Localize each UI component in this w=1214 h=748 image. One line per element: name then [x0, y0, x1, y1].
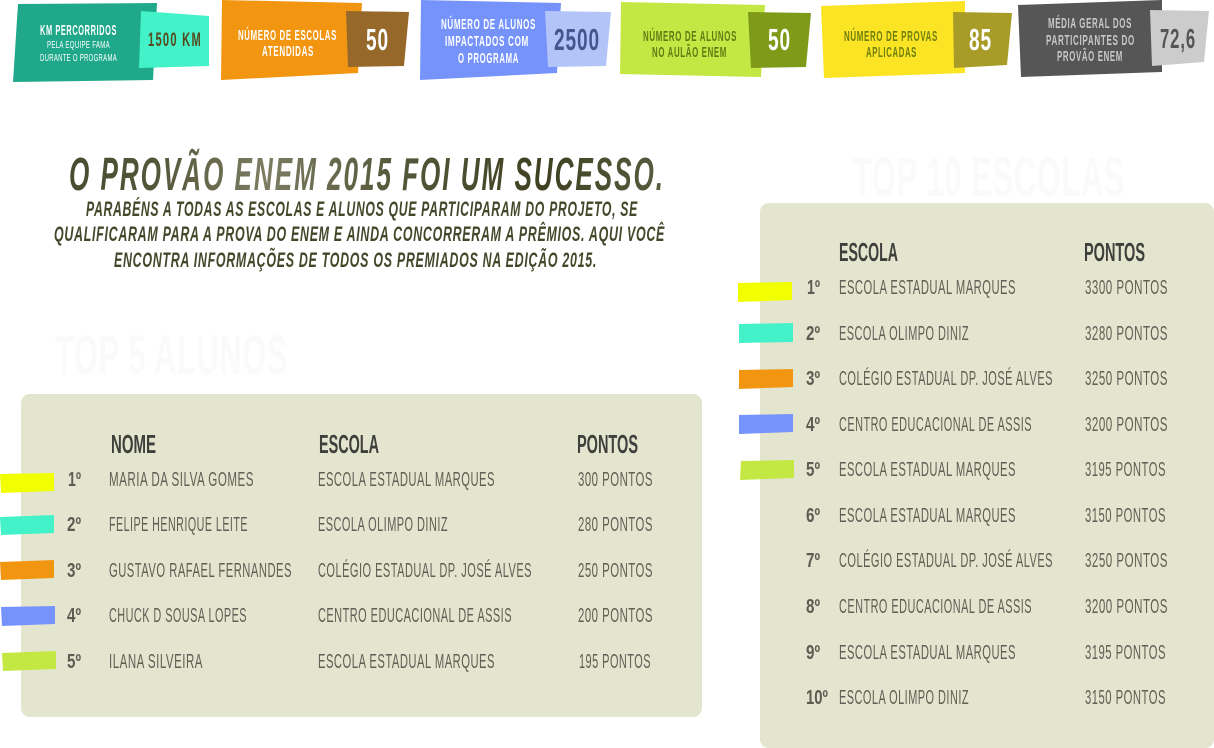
stat card: alunos no aulão: NO AULÃO ENEM [652, 43, 727, 61]
row 5: 5º [67, 651, 81, 673]
row 2: 2º [806, 323, 820, 345]
stat card: provas aplicadas: 85 [969, 22, 992, 57]
row 3: 3º [67, 560, 81, 582]
row 5: ESCOLA ESTADUAL MARQUES [318, 650, 495, 673]
row 4 [1, 604, 653, 627]
stat card: média geral: PROVÃO ENEM [1057, 47, 1123, 65]
stat card: média geral: PARTICIPANTES DO [1046, 33, 1135, 49]
stat card: alunos no aulão [620, 2, 811, 77]
row 2: ESCOLA OLIMPO DINIZ [318, 513, 448, 536]
row 2: ESCOLA OLIMPO DINIZ [839, 322, 969, 345]
stat card: km percorridos: DURANTE O PROGRAMA [40, 52, 117, 64]
table header [111, 429, 638, 459]
table header: NOME [111, 429, 156, 459]
row 1: 1º [68, 469, 81, 491]
row 10 [806, 686, 1166, 709]
stat card: alunos impactados [420, 0, 611, 80]
row 1: 300 PONTOS [578, 468, 653, 491]
stat card: alunos no aulão: NÚMERO DE ALUNOS [643, 27, 737, 45]
row 6: ESCOLA ESTADUAL MARQUES [839, 504, 1016, 527]
panel: top 10 escolas [738, 203, 1214, 748]
row 3: 3º [806, 368, 820, 390]
table header: PONTOS [577, 429, 638, 459]
stat card: escolas atendidas: NÚMERO DE ESCOLAS [238, 26, 337, 44]
stat card: escolas atendidas [221, 0, 409, 80]
stat card: alunos impactados: NÚMERO DE ALUNOS [441, 15, 536, 33]
title: O PROVÃO ENEM 2015 FOI UM SUCESSO. [69, 148, 665, 200]
heading: top 5 alunos: TOP 5 ALUNOS [55, 323, 288, 386]
row 8: CENTRO EDUCACIONAL DE ASSIS [839, 595, 1032, 618]
row 5: 5º [806, 459, 820, 481]
row 1: 1º [807, 277, 820, 299]
row 3: 250 PONTOS [578, 559, 653, 582]
stat card: provas aplicadas: APLICADAS [866, 45, 917, 61]
intro paragraph: ENCONTRA INFORMAÇÕES DE TODOS OS PREMIADOS NA EDIÇÃO 2015. [114, 248, 597, 272]
stat card: escolas atendidas: ATENDIDAS [262, 44, 314, 60]
row 5 [2, 650, 651, 673]
row 4: CHUCK D SOUSA LOPES [109, 604, 247, 627]
stat card: km percorridos: PELA EQUIPE FAMA [47, 39, 110, 51]
stat card: provas aplicadas: NÚMERO DE PROVAS [844, 27, 938, 45]
row 5: ILANA SILVEIRA [109, 650, 203, 673]
table header: PONTOS [1084, 237, 1145, 267]
stats strip [13, 0, 1209, 82]
stat card: alunos impactados: IMPACTADOS COM [445, 34, 529, 50]
row 5: 195 PONTOS [579, 650, 651, 673]
row 3 [0, 559, 653, 582]
row 7: 7º [806, 550, 820, 572]
row 6: 6º [806, 505, 820, 527]
intro paragraph: PARABÉNS A TODAS AS ESCOLAS E ALUNOS QUE PARTICIPARAM DO PROJETO, SE [86, 198, 638, 221]
stat card: alunos impactados: 2500 [554, 22, 600, 57]
stat card: km percorridos [13, 3, 209, 82]
stat card: km percorridos: KM PERCORRIDOS [40, 23, 117, 39]
row 4: 4º [67, 605, 81, 627]
stat card: provas aplicadas [821, 1, 1012, 78]
stat card: média geral: MÉDIA GERAL DOS [1048, 15, 1132, 32]
table header: ESCOLA [319, 429, 379, 459]
row 4: 200 PONTOS [578, 604, 653, 627]
stat card: média geral [1018, 0, 1209, 77]
row 1: ESCOLA ESTADUAL MARQUES [318, 468, 495, 491]
row 1: MARIA DA SILVA GOMES [109, 468, 254, 491]
panel: top 5 alunos [0, 394, 702, 717]
intro paragraph [54, 198, 665, 272]
stat card: alunos no aulão: 50 [768, 22, 791, 57]
row 10: ESCOLA OLIMPO DINIZ [839, 686, 969, 709]
row 1: ESCOLA ESTADUAL MARQUES [839, 276, 1016, 299]
row 1 [0, 468, 653, 493]
stat card: escolas atendidas: 50 [366, 22, 389, 57]
intro paragraph: QUALIFICARAM PARA A PROVA DO ENEM E AINDA CONCORRERAM A PRÊMIOS. AQUI VOCÊ [54, 222, 665, 246]
row 2: 280 PONTOS [578, 513, 653, 536]
row 2 [0, 513, 653, 536]
row 4: CENTRO EDUCACIONAL DE ASSIS [839, 413, 1032, 436]
row 3 [739, 367, 1168, 390]
row 9: 9º [806, 642, 820, 664]
row 2 [739, 322, 1168, 345]
row 10: 10º [806, 687, 828, 709]
row 2: FELIPE HENRIQUE LEITE [109, 513, 248, 536]
row 9: ESCOLA ESTADUAL MARQUES [839, 641, 1016, 664]
row 3: COLÉGIO ESTADUAL DP. JOSÉ ALVES [318, 559, 532, 582]
row 4: CENTRO EDUCACIONAL DE ASSIS [318, 604, 512, 627]
row 5: ESCOLA ESTADUAL MARQUES [839, 458, 1016, 481]
row 3: GUSTAVO RAFAEL FERNANDES [109, 559, 292, 582]
row 1 [738, 276, 1168, 302]
row 8: 8º [806, 596, 820, 618]
stat card: alunos impactados: O PROGRAMA [458, 51, 519, 67]
row 2: 2º [67, 514, 81, 536]
table header: ESCOLA [839, 237, 898, 267]
stat card: km percorridos: 1500 KM [148, 30, 202, 51]
row 4: 4º [806, 414, 820, 436]
table header [839, 237, 1145, 267]
